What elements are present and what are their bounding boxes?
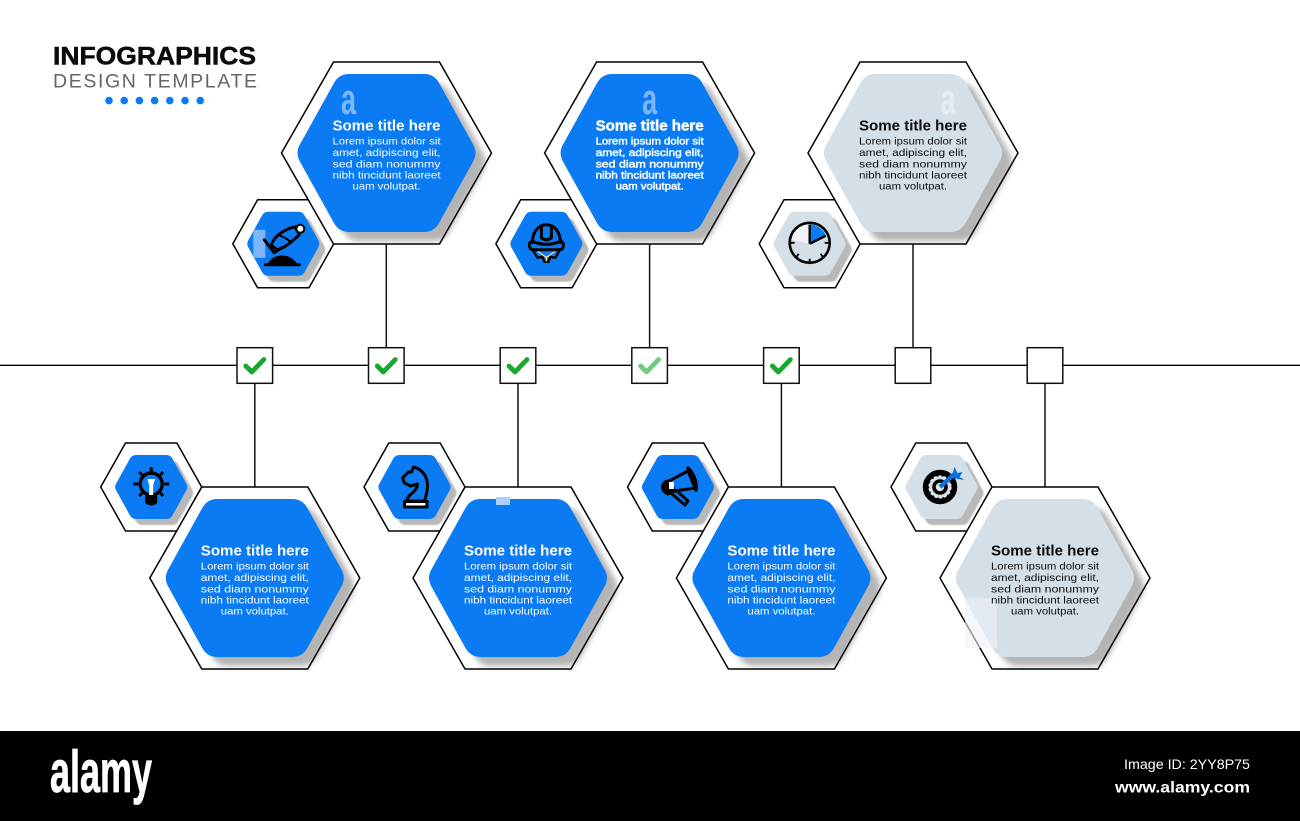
small hexagon: target [891,443,992,531]
text block: uam volutpat. [352,182,420,192]
text block [201,544,310,618]
text block: amet, adipiscing elit, [991,573,1099,584]
title: INFOGRAPHICS [53,43,256,70]
text block: sed diam nonummy [991,584,1100,596]
text block: nibh tincidunt laoreet [201,596,309,606]
footer image id: Image ID: 2YY8P75 [1124,756,1250,772]
text block: uam volutpat. [1011,606,1079,618]
text block: uam volutpat. [484,606,552,618]
text block: Lorem ipsum dolor sit [727,562,836,572]
timeline marker 5 [764,348,799,383]
big hexagon: step 3 [413,487,623,669]
small hexagon: megaphone [628,443,728,531]
text block: amet, adipiscing elit, [201,573,309,584]
timeline marker 7 [1027,348,1063,383]
text block: nibh tincidunt laoreet [991,596,1099,606]
small hexagon: clock [759,200,860,288]
text block: Some title here [201,544,309,560]
footer logo: alamy [50,739,152,805]
small hexagon: helmet [496,200,597,288]
timeline line [0,364,1300,366]
small hexagon: lightbulb [101,443,202,531]
text block [859,118,968,192]
footer url: www.alamy.com [1114,780,1250,796]
title: DESIGN TEMPLATE [53,70,257,92]
text block: Some title here [464,544,572,560]
big hexagon: step 7 [940,487,1150,669]
watermark [965,598,997,648]
title [53,43,257,92]
timeline marker 2 [368,348,404,383]
text block: uam volutpat. [221,606,289,618]
footer bar [0,731,1300,821]
big hexagon: step 2 [282,62,492,244]
text block [727,544,836,618]
icon: helmet [529,225,563,262]
text block: nibh tincidunt laoreet [332,170,441,182]
text block: sed diam nonummy [464,584,573,596]
text block [596,118,705,192]
icon: megaphone [662,468,696,505]
watermark [496,497,510,505]
watermark: a [642,75,657,124]
timeline marker 3 [500,348,536,383]
text block [464,544,573,618]
text block: sed diam nonummy [859,160,968,170]
text block [332,118,442,192]
timeline marker 4 [632,348,667,383]
text block: Some title here [596,118,704,134]
big hexagon: step 4 [545,62,755,244]
big hexagon: step 1 [150,487,360,669]
text block: Lorem ipsum dolor sit [596,136,704,148]
text block: nibh tincidunt laoreet [464,596,572,606]
text block: Some title here [727,544,835,560]
text block: sed diam nonummy [201,584,310,596]
big hexagon: step 6 [808,62,1018,244]
text block: sed diam nonummy [332,160,442,170]
small hexagon: chess knight [364,443,465,531]
watermark: a [341,75,356,124]
text block: nibh tincidunt laoreet [859,170,967,182]
watermark: a [940,75,956,124]
text block: amet, adipiscing elit, [332,148,440,159]
icon: chess knight [402,467,428,507]
text block: sed diam nonummy [727,584,836,596]
text block: sed diam nonummy [596,160,705,170]
text block: Lorem ipsum dolor sit [859,136,967,148]
text block: amet, adipiscing elit, [596,148,704,159]
icon: microscope [264,225,304,265]
small hexagon: microscope [233,200,334,288]
timeline marker 1 [237,348,273,383]
text block: Lorem ipsum dolor sit [991,562,1099,572]
text block: uam volutpat. [879,182,947,192]
text block: Some title here [991,544,1099,560]
timeline marker 6 [895,348,931,383]
text block: uam volutpat. [747,606,815,618]
big hexagon: step 5 [676,487,886,669]
watermark [253,230,265,258]
icon: target with dart [926,467,964,501]
text block: Lorem ipsum dolor sit [201,562,309,572]
text block: nibh tincidunt laoreet [596,170,704,182]
text block: amet, adipiscing elit, [727,573,835,584]
text block: Some title here [332,118,440,134]
text block: uam volutpat. [616,182,684,192]
text block [991,544,1100,618]
icon: lightbulb [133,467,169,506]
text block: Lorem ipsum dolor sit [332,136,441,148]
title dots [105,97,204,104]
icon: clock [790,223,830,263]
text block: Lorem ipsum dolor sit [464,562,572,572]
text block: amet, adipiscing elit, [464,573,572,584]
connectors [255,244,1045,487]
text block: Some title here [859,118,967,134]
text block: nibh tincidunt laoreet [727,596,836,606]
text block: amet, adipiscing elit, [859,148,967,159]
